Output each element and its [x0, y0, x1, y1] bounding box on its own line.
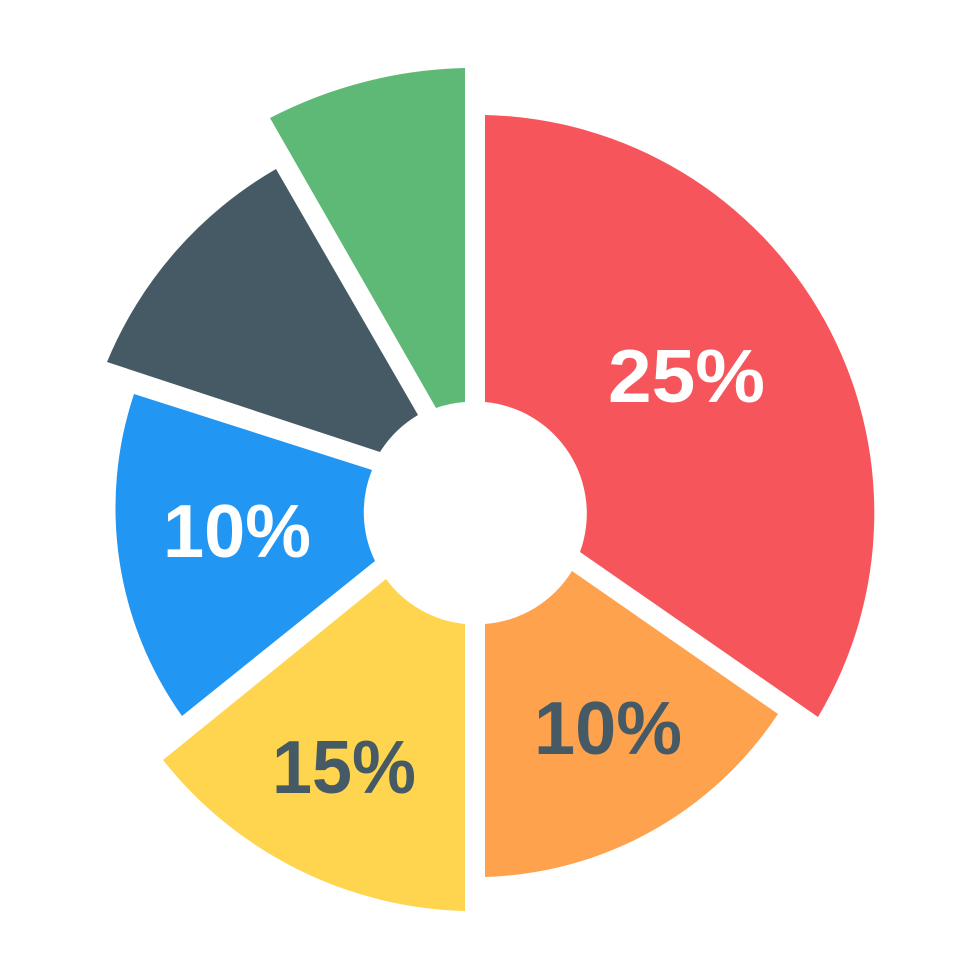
- panel: blue slice 10%: [115, 394, 375, 716]
- panel: red slice 25%: [485, 115, 874, 717]
- panel: orange slice 10%: [485, 571, 778, 877]
- panel: dark slate slice: [107, 169, 418, 452]
- label: 25%: 25%: [608, 334, 765, 418]
- panel: yellow slice 15%: [163, 579, 465, 911]
- label: 10% orange: 10%: [534, 686, 682, 770]
- label: 10% blue: 10%: [163, 489, 311, 573]
- label: 15%: 15%: [272, 725, 416, 809]
- panel: green slice: [270, 68, 465, 408]
